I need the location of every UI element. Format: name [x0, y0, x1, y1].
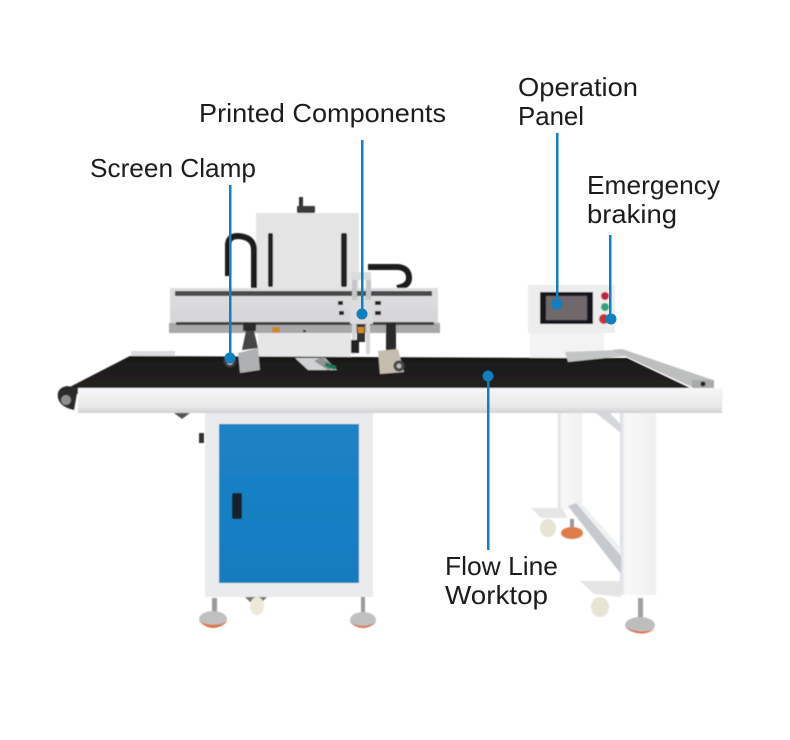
belt back plate — [131, 351, 175, 358]
gantry rail — [169, 288, 440, 334]
right cable chain — [368, 267, 409, 288]
callout: Printed Components — [199, 98, 446, 320]
callout: Operation Panel: Operation — [518, 72, 638, 102]
machine photo illustration — [58, 197, 723, 634]
cabinet caster — [245, 597, 267, 615]
callout: Printed Components: Printed Components — [199, 98, 446, 128]
operation panel — [528, 285, 615, 360]
conveyor belt — [60, 356, 690, 394]
callout: Flow Line Worktop — [445, 370, 558, 610]
cabinet — [199, 413, 373, 597]
right front caster and foot — [591, 597, 655, 634]
callout: Screen Clamp: Screen Clamp — [90, 153, 256, 183]
callout: Operation Panel — [518, 72, 638, 310]
right support frame — [531, 413, 656, 597]
side guide rail — [565, 349, 714, 389]
callout: Flow Line Worktop: Flow Line — [445, 551, 558, 581]
squeegee fixture — [295, 357, 337, 370]
conveyor front frame — [78, 388, 723, 413]
callout: Emergency braking — [587, 170, 720, 324]
callout: Emergency braking: braking — [587, 199, 677, 229]
blue door — [219, 424, 359, 583]
left leveling foot — [199, 598, 228, 628]
central carriage plate — [258, 333, 351, 357]
callout: Flow Line Worktop: Worktop — [445, 580, 548, 610]
right screen clamp — [378, 323, 404, 374]
callout: Screen Clamp — [90, 153, 256, 364]
right rear caster and foot — [540, 519, 583, 539]
small frame bracket — [174, 413, 190, 419]
right leveling foot — [350, 597, 376, 628]
door handle — [232, 493, 242, 519]
back panel — [256, 197, 359, 288]
callout: Operation Panel: Panel — [518, 101, 584, 131]
left cable chain — [228, 236, 254, 288]
belt end roller — [58, 386, 78, 410]
callout: Emergency braking: Emergency — [587, 170, 720, 200]
printed components carriage — [338, 272, 381, 354]
left screen clamp — [224, 323, 260, 373]
